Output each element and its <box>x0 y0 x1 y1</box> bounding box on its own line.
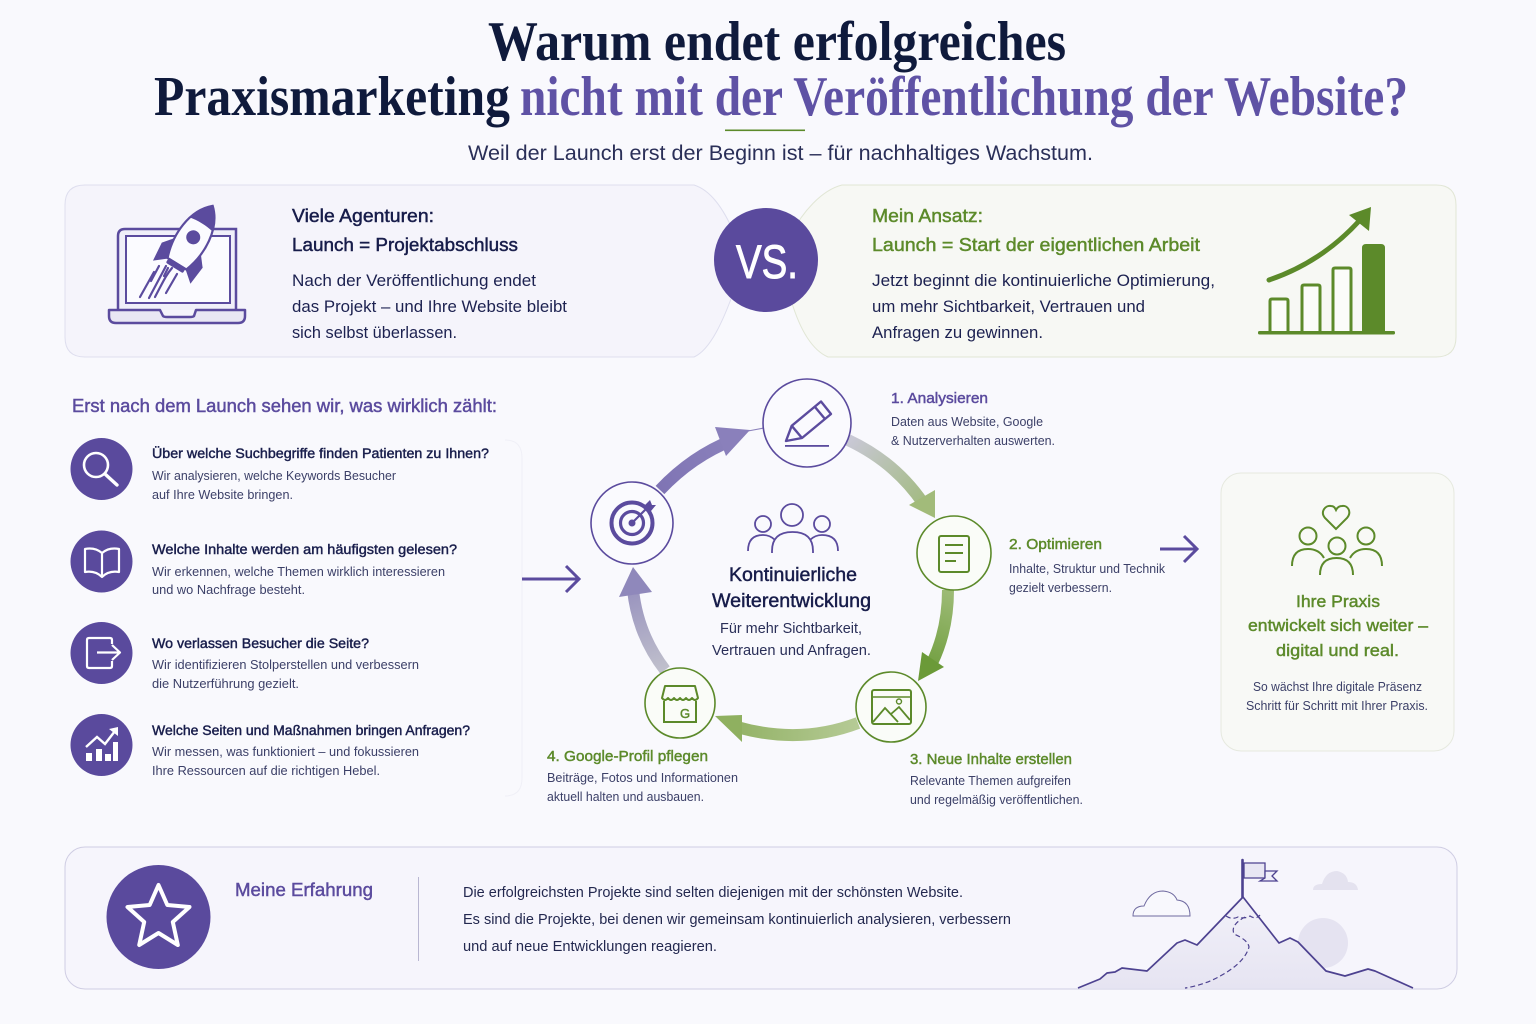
list item: Anfragen: Welche Seiten und Maßnahmen bringen Anfragen? <box>152 723 470 738</box>
panel: viele Agenturen <box>65 185 735 357</box>
step label: Neue Inhalte: und regelmäßig veröffentlichen. <box>910 793 1083 807</box>
text: result: digital und real. <box>1276 641 1399 660</box>
step node: document <box>917 516 991 590</box>
text: experience: und auf neue Entwicklungen reagieren. <box>463 938 717 955</box>
step label: Optimieren: Inhalte, Struktur und Technik <box>1009 562 1166 576</box>
icon: magnifier <box>70 438 132 500</box>
subtitle: Weil der Launch erst der Beginn ist – für nachhaltiges Wachstum. <box>468 142 1093 165</box>
panel: mein Ansatz <box>791 185 1456 357</box>
list item: Absprünge: Wo verlassen Besucher die Seite? <box>152 636 369 651</box>
step label: Analysieren <box>891 391 1055 448</box>
icon: open book <box>70 530 132 592</box>
panel: Meine Erfahrung <box>65 847 1457 989</box>
illustration: mountain with flag <box>1078 860 1413 988</box>
arrow: target to analysis <box>660 427 764 490</box>
step label: Optimieren <box>1009 537 1166 595</box>
icon: rising bars <box>70 714 132 776</box>
text: viele Agenturen: das Projekt – und Ihre Website bleibt <box>292 298 567 316</box>
list item: Absprünge <box>70 622 419 691</box>
arrow: content to google profile <box>715 715 858 742</box>
cycle diagram <box>547 379 1166 807</box>
list item: Inhalte <box>70 530 457 597</box>
text: result <box>1246 592 1429 713</box>
text: mein Ansatz: Launch = Start der eigentlichen Arbeit <box>872 235 1200 255</box>
list item: Suchbegriffe: Wir analysieren, welche Keywords Besucher <box>152 469 396 483</box>
text: result: Schritt für Schritt mit Ihrer Praxis. <box>1246 699 1428 713</box>
step label: Neue Inhalte <box>910 752 1083 807</box>
text: mein Ansatz: Mein Ansatz: <box>872 206 983 226</box>
text: centre label: Kontinuierliche <box>729 565 857 586</box>
list item: Suchbegriffe: auf Ihre Website bringen. <box>152 488 293 502</box>
step node: image <box>856 672 926 742</box>
text: mein Ansatz: um mehr Sichtbarkeit, Vertrauen und <box>872 298 1145 316</box>
arrow: list to cycle <box>522 566 579 592</box>
arrow: analysis to optimise <box>848 440 935 518</box>
text: viele Agenturen: Nach der Veröffentlichung endet <box>292 272 536 290</box>
list item: Inhalte: Wir erkennen, welche Themen wirklich interessieren <box>152 565 445 579</box>
step node: target <box>591 482 673 564</box>
list item: Suchbegriffe <box>70 438 489 502</box>
step label: Optimieren: 2. Optimieren <box>1009 537 1102 553</box>
arrow: optimise to content <box>918 590 948 681</box>
step label: Neue Inhalte: Relevante Themen aufgreifen <box>910 774 1071 788</box>
text: result: So wächst Ihre digitale Präsenz <box>1253 680 1422 694</box>
list item: Absprünge: die Nutzerführung gezielt. <box>152 677 299 691</box>
list item: Anfragen: Ihre Ressourcen auf die richtigen Hebel. <box>152 764 380 778</box>
step label: Google-Profil: aktuell halten und ausbauen. <box>547 790 704 804</box>
icon: laptop with rocket <box>109 193 245 323</box>
text: centre label: Vertrauen und Anfragen. <box>712 642 871 659</box>
text: centre label <box>712 565 871 659</box>
step label: Google-Profil: Beiträge, Fotos und Informationen <box>547 771 738 785</box>
text: viele Agenturen: Launch = Projektabschluss <box>292 235 518 255</box>
step node: store: G <box>680 706 690 721</box>
arrow: cycle to result <box>1160 536 1197 562</box>
text: experience <box>463 884 1011 955</box>
list item: Anfragen: Wir messen, was funktioniert – und fokussieren <box>152 745 419 759</box>
step label: Neue Inhalte: 3. Neue Inhalte erstellen <box>910 752 1072 768</box>
icon: team in centre <box>748 504 838 553</box>
title: Praxismarketing <box>154 66 510 128</box>
step label: Google-Profil: 4. Google-Profil pflegen <box>547 749 708 765</box>
list item: Absprünge: Wir identifizieren Stolperstellen und verbessern <box>152 658 419 672</box>
text: centre label: Weiterentwicklung <box>712 591 871 612</box>
text: result: Ihre Praxis <box>1296 592 1380 611</box>
step label: Analysieren: & Nutzerverhalten auswerten. <box>891 434 1055 448</box>
text: mein Ansatz: Jetzt beginnt die kontinuierliche Optimierung, <box>872 272 1215 290</box>
text: viele Agenturen: Viele Agenturen: <box>292 206 434 226</box>
list item: Inhalte: Welche Inhalte werden am häufigsten gelesen? <box>152 542 457 557</box>
title: Warum endet erfolgreiches <box>488 11 1066 73</box>
step label: Analysieren: 1. Analysieren <box>891 391 988 407</box>
step node: pencil <box>763 379 851 467</box>
VS badge <box>714 208 818 312</box>
icon: people with heart <box>1292 506 1382 575</box>
title <box>154 11 1408 131</box>
panel: result <box>1221 473 1454 751</box>
section heading: Erst nach dem Launch sehen wir, was wirklich zählt: <box>72 396 497 416</box>
text: mein Ansatz: Anfragen zu gewinnen. <box>872 324 1043 342</box>
text: experience: Die erfolgreichsten Projekte sind selten diejenigen mit der schönsten Website. <box>463 884 963 901</box>
text: experience: Es sind die Projekte, bei denen wir gemeinsam kontinuierlich analysieren, verbessern <box>463 911 1011 928</box>
step label: Google-Profil <box>547 749 738 804</box>
list panel frame <box>505 440 522 796</box>
heading: Meine Erfahrung: Meine Erfahrung <box>235 879 373 900</box>
text: viele Agenturen <box>292 206 567 342</box>
step node: store <box>645 668 715 738</box>
text: result: entwickelt sich weiter – <box>1248 616 1429 635</box>
list item: Inhalte: und wo Nachfrage besteht. <box>152 583 305 597</box>
list item: Suchbegriffe: Über welche Suchbegriffe finden Patienten zu Ihnen? <box>152 446 489 461</box>
text: mein Ansatz <box>872 206 1215 342</box>
arrow: google profile to target <box>619 567 665 670</box>
icon: star badge <box>106 865 210 969</box>
step label: Optimieren: gezielt verbessern. <box>1009 581 1112 595</box>
VS badge: VS. <box>736 235 798 288</box>
list item: Anfragen <box>70 714 470 778</box>
step label: Analysieren: Daten aus Website, Google <box>891 415 1043 429</box>
icon: exit door <box>70 622 132 684</box>
icon: growth chart <box>1258 207 1395 334</box>
text: viele Agenturen: sich selbst überlassen. <box>292 324 457 342</box>
text: centre label: Für mehr Sichtbarkeit, <box>720 620 862 637</box>
